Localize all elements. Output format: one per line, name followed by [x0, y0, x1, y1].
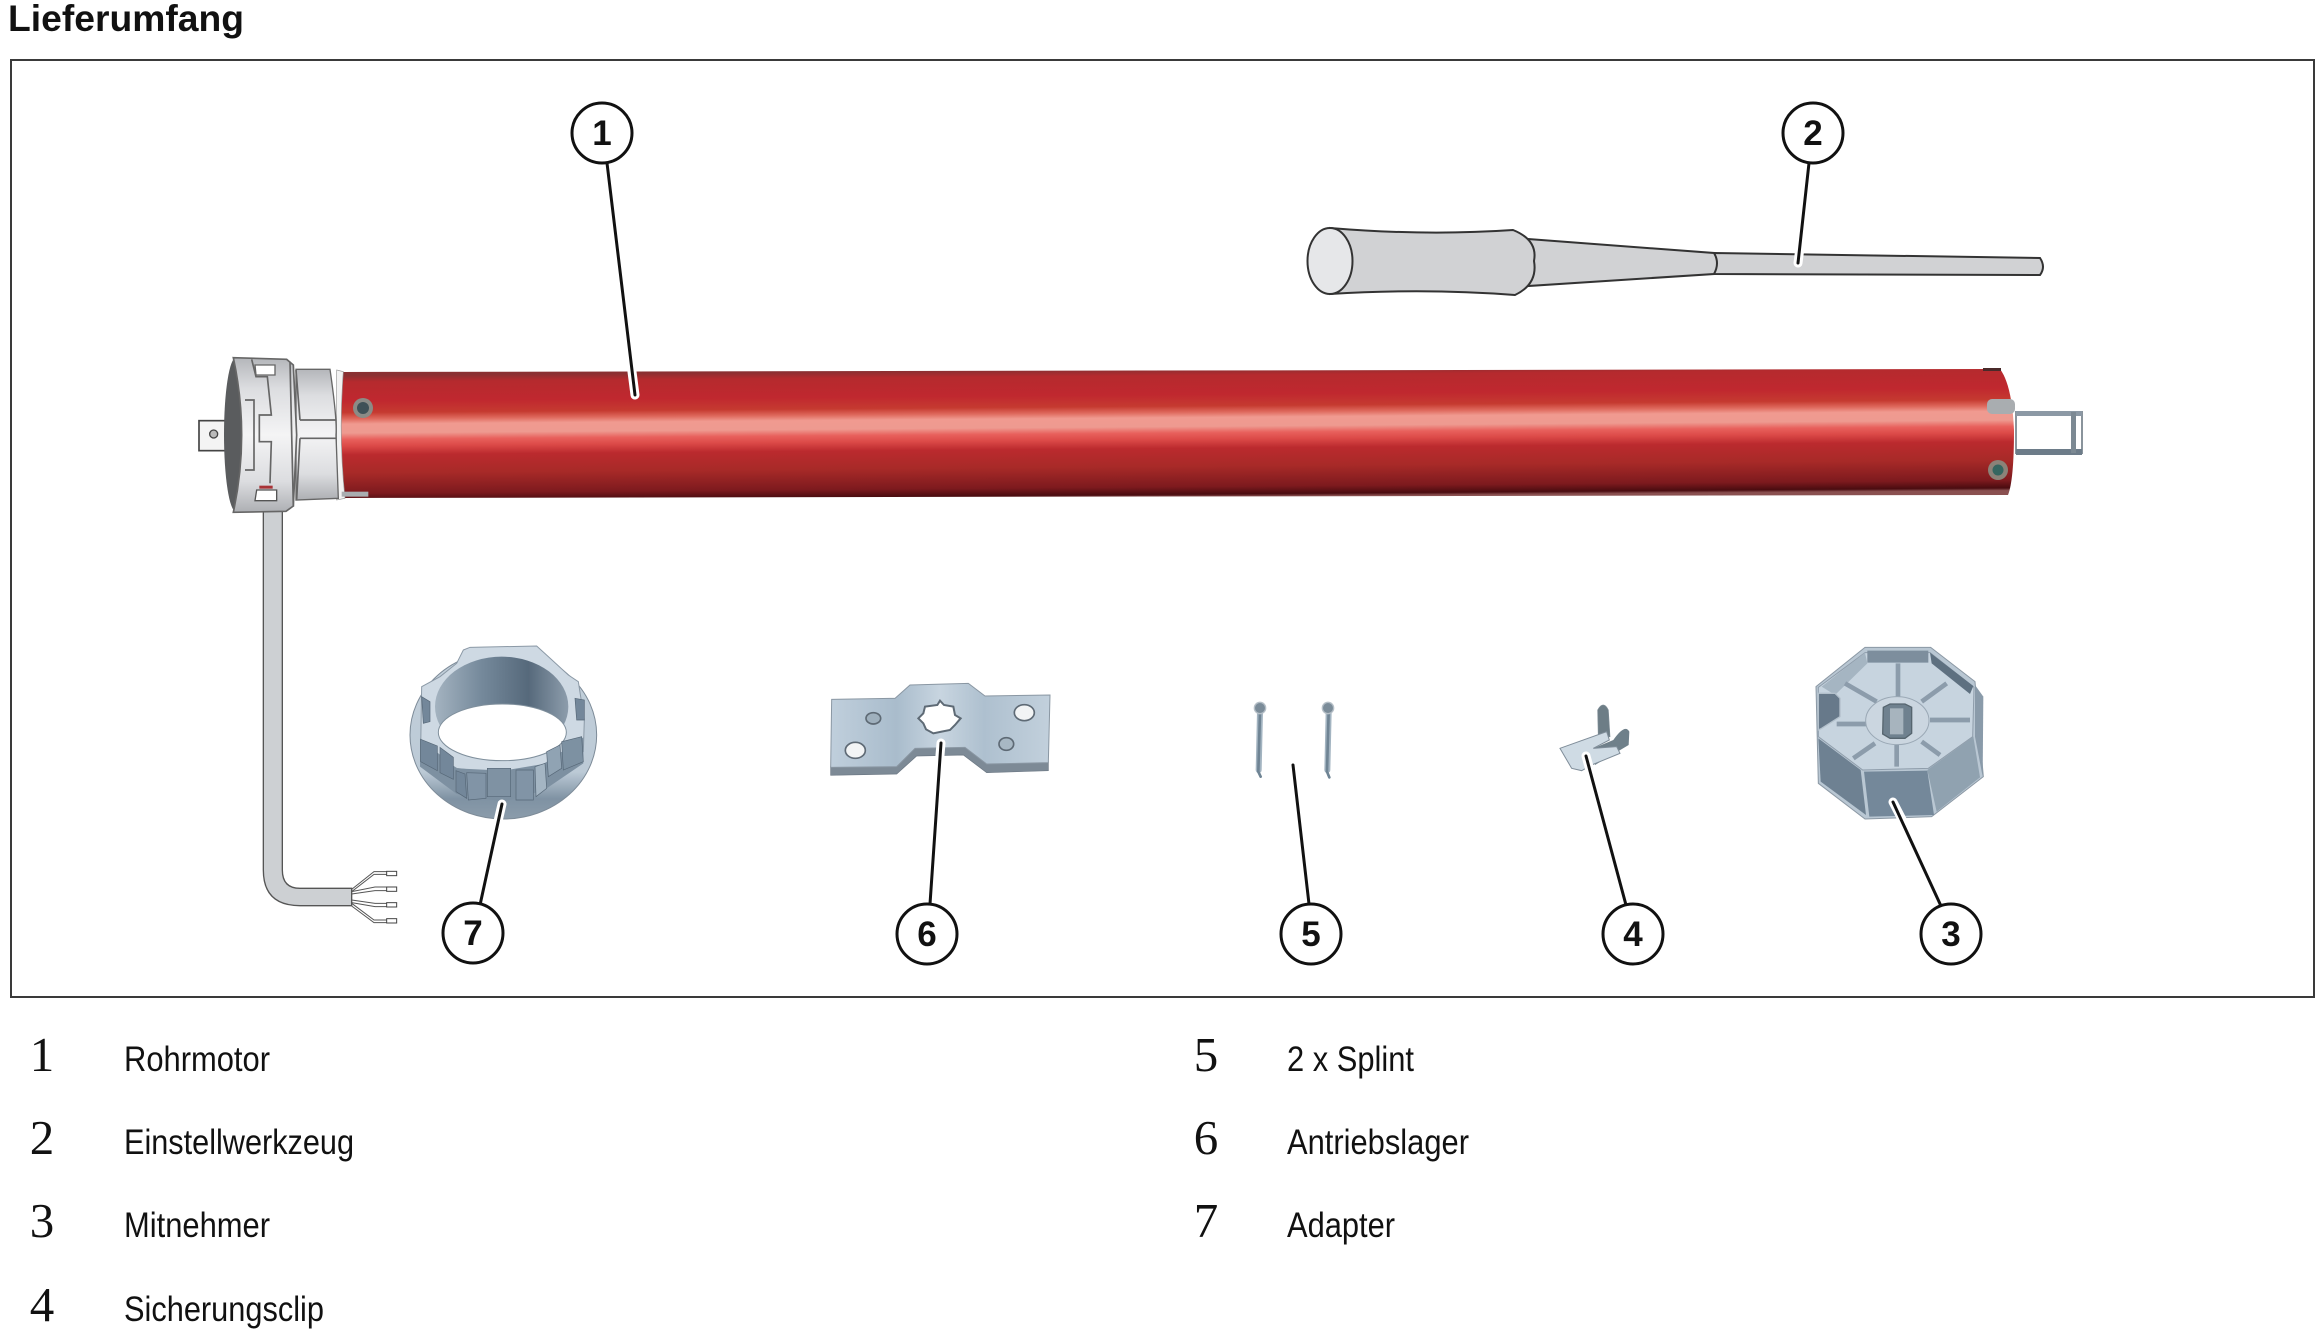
item 2: setting tool [1308, 228, 2043, 295]
legend: left column: Sicherungsclip [124, 1290, 324, 1329]
callout 4 with leader: 4 [1623, 915, 1643, 954]
legend: left column: 1 [30, 1027, 54, 1082]
legend: right column: 2 x Splint [1287, 1040, 1414, 1079]
legend: right column: 6 [1194, 1110, 1218, 1165]
callout 7 with leader [443, 804, 503, 963]
callout 3 with leader: 3 [1941, 915, 1961, 954]
legend: right column: 5 [1194, 1027, 1218, 1082]
item 7: adapter [410, 646, 597, 819]
callout 2 with leader: 2 [1803, 114, 1823, 153]
legend: left column: Mitnehmer [124, 1206, 270, 1245]
item 6: drive bearing bracket [831, 683, 1050, 775]
legend: left column: Rohrmotor [124, 1040, 270, 1079]
callout 6 with leader: 6 [917, 915, 937, 954]
legend: right column [1194, 1027, 1469, 1248]
motor head [199, 358, 368, 512]
callout 5 with leader: 5 [1301, 915, 1321, 954]
callout 4 with leader [1586, 756, 1663, 964]
callout 6 with leader [897, 743, 957, 964]
motor screws [353, 398, 2008, 480]
callout 2 with leader [1783, 103, 1843, 263]
motor tube [339, 369, 2014, 498]
motor shaft end [1983, 368, 2082, 455]
item 3: octagonal drive wheel [1816, 647, 1983, 819]
callout 7 with leader: 7 [463, 914, 483, 953]
panel: delivery contents frame [11, 60, 2314, 997]
callout 1 with leader [572, 103, 635, 395]
legend: left column [30, 1027, 354, 1330]
legend: left column: Einstellwerkzeug [124, 1123, 354, 1162]
callout 5 with leader [1281, 765, 1341, 964]
legend: left column: 2 [30, 1110, 54, 1165]
cable with wires [263, 507, 397, 923]
legend: right column: Antriebslager [1287, 1123, 1469, 1162]
callout 1 with leader: 1 [592, 114, 612, 153]
callout 3 with leader [1893, 802, 1981, 964]
legend: left column: 3 [30, 1193, 54, 1248]
item 4: securing clip [1560, 705, 1629, 771]
legend: right column: 7 [1194, 1193, 1218, 1248]
legend: right column: Adapter [1287, 1206, 1395, 1245]
item 5: cotter pins [1254, 702, 1334, 777]
